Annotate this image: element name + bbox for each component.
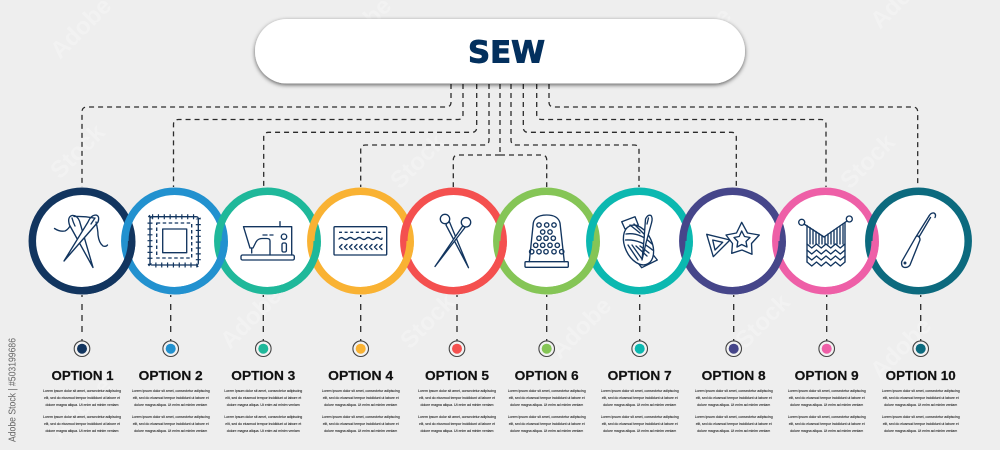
option 3 marker and text: elit, sed do eiusmod tempor incididunt ut labore et [225,422,301,426]
option 10 marker and text: dolore magna aliqua. Ut enim ad minim veniam [884,429,957,433]
option 4 marker and text: elit, sed do eiusmod tempor incididunt ut labore et [323,422,399,426]
ring: option 7 [590,191,689,291]
option 3 marker and text: Lorem ipsum dolor sit amet, consectetur adipiscing [224,415,302,419]
option 1 marker and text [43,295,121,433]
option 5 marker and text: Lorem ipsum dolor sit amet, consectetur adipiscing [418,415,496,419]
option 9 marker and text: dolore magna aliqua. Ut enim ad minim veniam [790,403,863,407]
option 6 marker and text [508,295,586,433]
option 3 marker and text [224,295,302,433]
option 8 marker and text: dolore magna aliqua. Ut enim ad minim veniam [697,403,770,407]
icon: quilted square patch [150,217,198,265]
option 5 marker and text: dolore magna aliqua. Ut enim ad minim veniam [420,429,494,433]
option 1 marker and text: Lorem ipsum dolor sit amet, consectetur adipiscing [43,389,121,393]
option 8 marker and text: Lorem ipsum dolor sit amet, consectetur adipiscing [695,415,773,419]
option 9 marker and text: Lorem ipsum dolor sit amet, consectetur adipiscing [788,415,866,419]
option 2 marker and text: elit, sed do eiusmod tempor incididunt ut labore et [133,422,209,426]
option 6 marker and text: dolore magna aliqua. Ut enim ad minim veniam [510,429,583,433]
option 6 marker and text: Lorem ipsum dolor sit amet, consectetur adipiscing [508,415,586,419]
option 10 marker and text: OPTION 10 [886,368,956,383]
text: Adobe [665,2,737,74]
text: Adobe [865,312,937,384]
option 8 marker and text: elit, sed do eiusmod tempor incididunt ut labore et [696,422,772,426]
option 1 marker and text: elit, sed do eiusmod tempor incididunt ut labore et [44,422,120,426]
option 7 marker and text: dolore magna aliqua. Ut enim ad minim veniam [603,429,676,433]
option 9 marker and text: dolore magna aliqua. Ut enim ad minim veniam [790,429,863,433]
option 9 marker and text: Lorem ipsum dolor sit amet, consectetur adipiscing [788,389,866,393]
option 4 marker and text: Lorem ipsum dolor sit amet, consectetur adipiscing [322,415,400,419]
option 8 marker and text: Lorem ipsum dolor sit amet, consectetur adipiscing [695,389,773,393]
option 2 marker and text: OPTION 2 [139,368,203,383]
option 8 marker and text: dolore magna aliqua. Ut enim ad minim veniam [697,429,770,433]
option 5 marker and text: OPTION 5 [425,368,489,383]
ring: option 6 [497,191,596,291]
option 7 marker and text: elit, sed do eiusmod tempor incididunt ut labore et [602,422,678,426]
title pill [255,19,745,84]
option 6 marker and text: elit, sed do eiusmod tempor incididunt ut labore et [509,396,585,400]
option 7 marker and text: dolore magna aliqua. Ut enim ad minim veniam [603,403,676,407]
option 8 marker and text [695,295,773,433]
option 2 marker and text: elit, sed do eiusmod tempor incididunt ut labore et [133,396,209,400]
option 8 marker and text: elit, sed do eiusmod tempor incididunt ut labore et [696,396,772,400]
text: Stock [395,288,461,354]
text: Stock [730,288,796,354]
text: Stock [385,128,451,194]
icon: thimble [525,215,568,267]
option 10 marker and text: elit, sed do eiusmod tempor incididunt ut labore et [883,396,959,400]
source credit: Adobe Stock | #503199686 [6,338,18,442]
icon: sewing machine [241,222,294,260]
option 1 marker and text: elit, sed do eiusmod tempor incididunt ut labore et [44,396,120,400]
option 7 marker and text: OPTION 7 [608,368,672,383]
ring: option 9 [776,191,875,291]
option 4 marker and text: dolore magna aliqua. Ut enim ad minim veniam [324,429,397,433]
option 2 marker and text: dolore magna aliqua. Ut enim ad minim veniam [134,429,207,433]
option 10 marker and text: elit, sed do eiusmod tempor incididunt ut labore et [883,422,959,426]
text: Adobe [545,292,617,364]
icon: knitting on needles [799,216,852,266]
option 10 marker and text: Lorem ipsum dolor sit amet, consectetur adipiscing [882,389,960,393]
option 7 marker and text [601,295,679,433]
option 6 marker and text: dolore magna aliqua. Ut enim ad minim veniam [510,403,583,407]
icon: crossed needles with thread [54,215,108,268]
option 3 marker and text: dolore magna aliqua. Ut enim ad minim veniam [227,403,300,407]
icon: triangle and star rulers [707,222,759,257]
icon: yarn ball with needle [617,215,660,270]
option 10 marker and text: Lorem ipsum dolor sit amet, consectetur adipiscing [882,415,960,419]
option 8 marker and text: OPTION 8 [702,368,766,383]
option 4 marker and text: Lorem ipsum dolor sit amet, consectetur adipiscing [322,389,400,393]
option 5 marker and text: elit, sed do eiusmod tempor incididunt ut labore et [419,422,495,426]
text: Adobe [215,282,287,354]
text: Stock [45,118,111,184]
option 5 marker and text: dolore magna aliqua. Ut enim ad minim veniam [420,403,494,407]
ring: option 4 [311,191,410,291]
option 1 marker and text: OPTION 1 [52,368,114,383]
option 3 marker and text: OPTION 3 [231,368,295,383]
option 5 marker and text: elit, sed do eiusmod tempor incididunt ut labore et [419,396,495,400]
option 1 marker and text: dolore magna aliqua. Ut enim ad minim veniam [46,403,118,407]
option 10 marker and text [882,295,960,433]
title pill: SEW [468,36,545,71]
ring: option 5 [404,191,503,291]
option 5 marker and text [418,295,496,433]
option 4 marker and text: OPTION 4 [328,368,394,383]
ring: option 2 [125,191,224,291]
text: Stock [835,128,901,194]
icon: crossed pins [435,214,471,268]
icon: stitch sample panel [334,227,387,255]
option 4 marker and text [322,295,400,433]
option 6 marker and text: OPTION 6 [515,368,579,383]
option 1 marker and text: Lorem ipsum dolor sit amet, consectetur adipiscing [43,415,121,419]
icon: crochet hook [902,213,936,267]
option 2 marker and text: Lorem ipsum dolor sit amet, consectetur adipiscing [132,415,210,419]
option 10 marker and text: dolore magna aliqua. Ut enim ad minim veniam [884,403,957,407]
option 1 marker and text: dolore magna aliqua. Ut enim ad minim veniam [46,429,118,433]
option 7 marker and text: elit, sed do eiusmod tempor incididunt ut labore et [602,396,678,400]
option 4 marker and text: dolore magna aliqua. Ut enim ad minim veniam [324,403,397,407]
ring: option 10 [869,191,968,291]
option 2 marker and text: dolore magna aliqua. Ut enim ad minim veniam [134,403,207,407]
ring: option 8 [683,191,782,291]
option 7 marker and text: Lorem ipsum dolor sit amet, consectetur adipiscing [601,415,679,419]
option 5 marker and text: Lorem ipsum dolor sit amet, consectetur adipiscing [418,389,496,393]
option 3 marker and text: elit, sed do eiusmod tempor incididunt ut labore et [225,396,301,400]
option 4 marker and text: elit, sed do eiusmod tempor incididunt ut labore et [323,396,399,400]
option 9 marker and text: elit, sed do eiusmod tempor incididunt ut labore et [789,396,865,400]
option 9 marker and text [788,295,866,433]
option 9 marker and text: OPTION 9 [795,368,859,383]
ring: option 3 [218,191,317,291]
dashed connectors from title to circles [82,84,918,187]
ring: option 1 [32,191,132,291]
option 3 marker and text: Lorem ipsum dolor sit amet, consectetur adipiscing [224,389,302,393]
option 9 marker and text: elit, sed do eiusmod tempor incididunt ut labore et [789,422,865,426]
option 6 marker and text: elit, sed do eiusmod tempor incididunt ut labore et [509,422,585,426]
option 3 marker and text: dolore magna aliqua. Ut enim ad minim veniam [227,429,300,433]
option 7 marker and text: Lorem ipsum dolor sit amet, consectetur adipiscing [601,389,679,393]
option 2 marker and text [132,295,210,433]
text: Adobe [45,372,117,444]
option 6 marker and text: Lorem ipsum dolor sit amet, consectetur adipiscing [508,389,586,393]
option 2 marker and text: Lorem ipsum dolor sit amet, consectetur adipiscing [132,389,210,393]
